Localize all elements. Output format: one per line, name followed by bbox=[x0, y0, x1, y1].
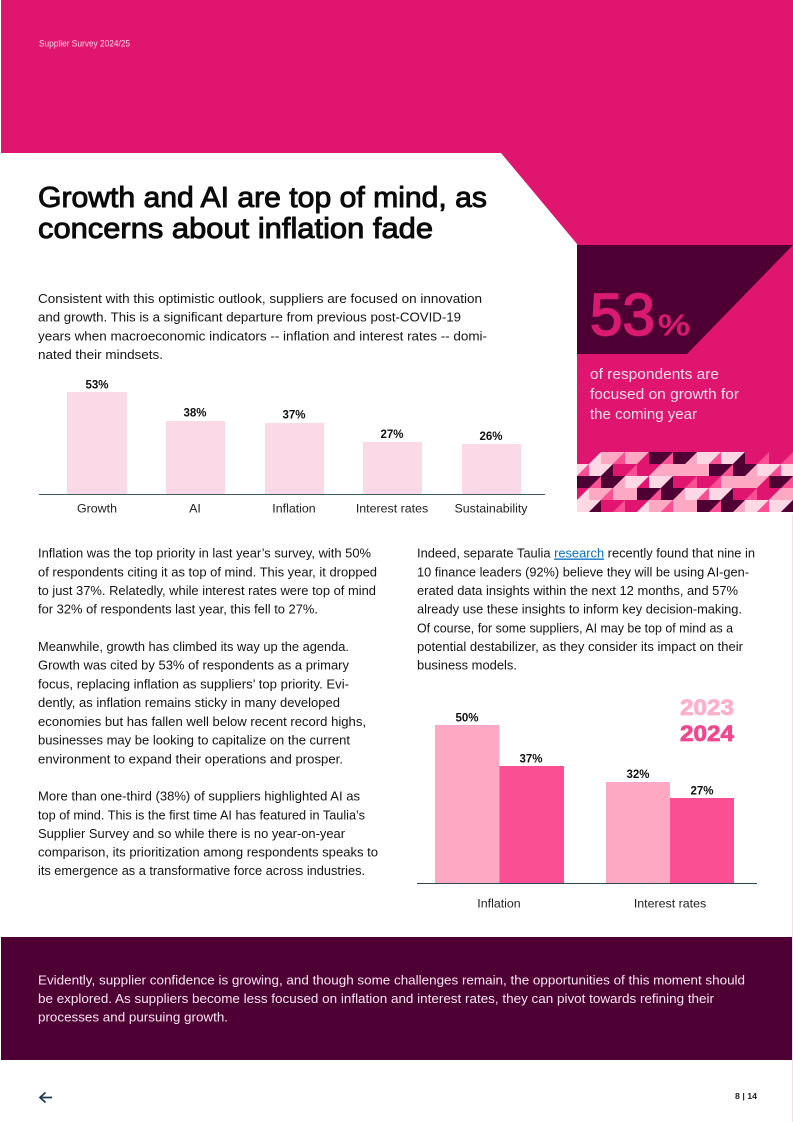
intro paragraph bbox=[38, 291, 487, 362]
left column body text bbox=[38, 546, 378, 878]
left column body text: Supplier Survey and so while there is no year-on-year bbox=[38, 826, 346, 841]
icon: back arrow bbox=[40, 1092, 52, 1102]
big number bbox=[590, 282, 690, 348]
intro paragraph: nated their mindsets. bbox=[38, 347, 163, 362]
legend bbox=[680, 695, 735, 746]
bars bbox=[67, 392, 521, 494]
value labels bbox=[85, 380, 503, 443]
left column body text: Inflation was the top priority in last year’s survey, with 50% bbox=[38, 546, 371, 560]
title: concerns about inflation fade bbox=[38, 213, 433, 245]
left column body text: of respondents citing it as top of mind. This year, it dropped bbox=[38, 564, 377, 580]
right column body text: Of course, for some suppliers, AI may be top of mind as a bbox=[417, 620, 734, 636]
intro paragraph: years when macroeconomic indicators -- inflation and interest rates -- domi- bbox=[38, 328, 487, 344]
value labels bbox=[455, 712, 714, 798]
value labels: 37% bbox=[282, 410, 306, 422]
left column body text: More than one-third (38%) of suppliers highlighted AI as bbox=[38, 788, 360, 804]
intro paragraph: and growth. This is a significant departure from previous post-COVID-19 bbox=[38, 310, 461, 324]
header label: Supplier Survey 2024/25 bbox=[39, 38, 130, 48]
left column body text: top of mind. This is the first time AI has featured in Taulia’s bbox=[38, 808, 365, 822]
stat description: of respondents are bbox=[590, 366, 719, 383]
right column body text: business models. bbox=[417, 658, 517, 672]
left column body text: dently, as inflation remains sticky in many developed bbox=[38, 695, 340, 710]
category labels: Inflation bbox=[272, 502, 316, 516]
bar chart: 2023 vs 2024 comparison bbox=[417, 695, 757, 910]
category labels bbox=[77, 502, 528, 516]
value labels: 26% bbox=[479, 431, 503, 443]
intro paragraph: Consistent with this optimistic outlook, suppliers are focused on innovation bbox=[38, 291, 482, 306]
legend: 2024 bbox=[680, 721, 735, 746]
right column body text: Indeed, separate Taulia research recently found that nine in bbox=[417, 546, 755, 560]
right column body text: 10 finance leaders (92%) believe they will be using AI-gen- bbox=[417, 564, 749, 580]
title: Growth and AI are top of mind, as bbox=[38, 182, 487, 214]
conclusion text: processes and pursuing growth. bbox=[38, 1010, 228, 1024]
conclusion text: Evidently, supplier confidence is growing, and though some challenges remain, the opportunities of this moment should bbox=[38, 972, 745, 988]
left column body text: businesses may be looking to capitalize on the current bbox=[38, 732, 350, 748]
right column body text: already use these insights to inform key decision-making. bbox=[417, 602, 742, 616]
value labels: 37% bbox=[519, 754, 543, 766]
right column body text: erated data insights within the next 12 months, and 57% bbox=[417, 583, 738, 598]
category labels: Growth bbox=[77, 502, 117, 516]
stat description: focused on growth for bbox=[590, 386, 739, 403]
value labels: 50% bbox=[455, 712, 479, 724]
page number: 8 | 14 bbox=[735, 1091, 757, 1101]
left column body text: economies but has fallen well below recent record highs, bbox=[38, 714, 366, 729]
title bbox=[38, 182, 487, 245]
left column body text: Meanwhile, growth has climbed its way up the agenda. bbox=[38, 639, 349, 654]
category labels: Interest rates bbox=[356, 502, 428, 516]
value labels: 27% bbox=[380, 429, 404, 441]
stat description: the coming year bbox=[590, 406, 697, 423]
dark stat shape bbox=[577, 245, 793, 354]
stat description bbox=[590, 366, 739, 423]
conclusion text: be explored. As suppliers become less focused on inflation and interest rates, they can pivot towards refining their bbox=[38, 991, 715, 1006]
left column body text: focus, replacing inflation as suppliers’ top priority. Evi- bbox=[38, 676, 349, 692]
left column body text: environment to expand their operations and prosper. bbox=[38, 752, 343, 766]
decorative geometric pattern bbox=[560, 452, 793, 512]
2023 bars bbox=[435, 725, 670, 883]
value labels: 32% bbox=[626, 769, 650, 781]
panel: 53% stat callout bbox=[560, 245, 793, 512]
panel: conclusion band bbox=[1, 937, 792, 1060]
conclusion text bbox=[38, 972, 745, 1024]
left column body text: its emergence as a transformative force across industries. bbox=[38, 863, 365, 878]
value labels: 53% bbox=[85, 380, 109, 392]
category labels bbox=[477, 896, 706, 910]
value labels: 27% bbox=[690, 786, 714, 798]
2024 bars bbox=[500, 766, 734, 883]
bar chart: top priorities bbox=[39, 380, 545, 516]
category labels: AI bbox=[189, 502, 201, 516]
legend: 2023 bbox=[680, 695, 734, 720]
big number: % bbox=[658, 310, 690, 342]
category labels: Sustainability bbox=[454, 502, 528, 516]
value labels: 38% bbox=[183, 408, 207, 420]
big number: 53 bbox=[590, 282, 655, 348]
left column body text: comparison, its prioritization among respondents speaks to bbox=[38, 844, 378, 860]
category labels: Interest rates bbox=[634, 896, 706, 910]
left column body text: for 32% of respondents last year, this fell to 27%. bbox=[38, 602, 318, 616]
category labels: Inflation bbox=[477, 896, 521, 910]
left column body text: to just 37%. Relatedly, while interest rates were top of mind bbox=[38, 583, 376, 598]
right column body text: potential destabilizer, as they consider its impact on their bbox=[417, 639, 744, 654]
right column body text bbox=[417, 546, 755, 672]
left column body text: Growth was cited by 53% of respondents as a primary bbox=[38, 658, 349, 672]
